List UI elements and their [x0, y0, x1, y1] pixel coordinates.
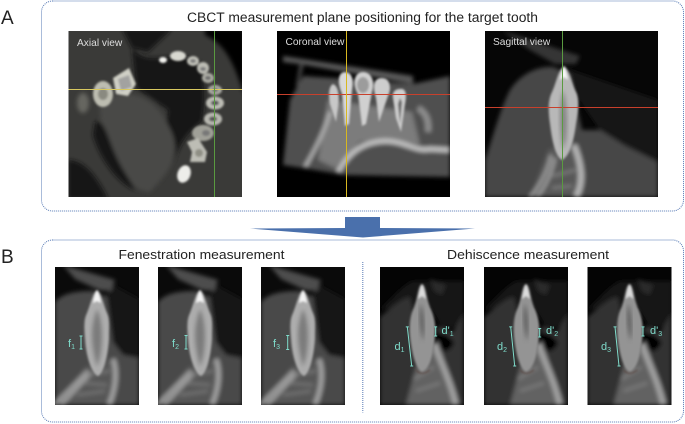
image: dehiscence d1: 1 — [450, 331, 454, 338]
image: dehiscence d1: d — [394, 341, 401, 353]
panel B: measurements — [42, 240, 684, 422]
divider — [362, 262, 364, 412]
image: fenestration f3: 3 — [276, 344, 280, 351]
panel A: CBCT positioning — [42, 1, 684, 211]
image: fenestration f3 — [260, 265, 345, 405]
image: axial view — [68, 29, 244, 199]
image: dehiscence d2: 2 — [554, 331, 558, 338]
image: coronal view — [277, 31, 450, 197]
image: dehiscence d2: d — [497, 341, 503, 353]
image: dehiscence d3 — [588, 267, 672, 405]
heading: fenestration: Fenestration measurement — [118, 247, 285, 262]
coronal reference lines — [277, 31, 450, 197]
image: dehiscence d2: 2 — [503, 347, 507, 354]
image: dehiscence d1: d' — [442, 325, 450, 337]
image: fenestration f1 — [54, 265, 139, 405]
image: dehiscence d3: 3 — [607, 347, 611, 354]
label: axial view: Axial view — [77, 38, 123, 49]
image: fenestration f1: f — [68, 338, 71, 350]
image: dehiscence d2: d' — [546, 325, 554, 337]
image: dehiscence d3: 3 — [658, 331, 662, 338]
image: fenestration f3: f — [273, 338, 276, 350]
image: fenestration f1: 1 — [71, 344, 75, 351]
label: B: B — [1, 247, 14, 268]
label: A: A — [1, 8, 14, 29]
label: coronal view: Coronal view — [286, 37, 345, 48]
image: dehiscence d2 — [484, 267, 568, 405]
title: CBCT measurement plane positioning: CBCT measurement plane positioning for the target tooth — [187, 10, 538, 25]
label: sagittal view: Sagittal view — [493, 37, 551, 48]
arrow: down — [250, 217, 475, 238]
image: dehiscence d3: d — [601, 341, 607, 353]
heading: dehiscence: Dehiscence measurement — [447, 247, 609, 262]
sagittal reference lines — [485, 31, 658, 197]
image: fenestration f2: 2 — [175, 344, 179, 351]
image: dehiscence d3: d' — [650, 325, 658, 337]
image: fenestration f2 — [157, 265, 242, 405]
image: dehiscence d1 — [380, 267, 464, 405]
image: sagittal view — [485, 31, 658, 197]
axial reference lines — [68, 31, 242, 197]
image: fenestration f2: f — [172, 338, 175, 350]
image: dehiscence d1: 1 — [401, 347, 405, 354]
